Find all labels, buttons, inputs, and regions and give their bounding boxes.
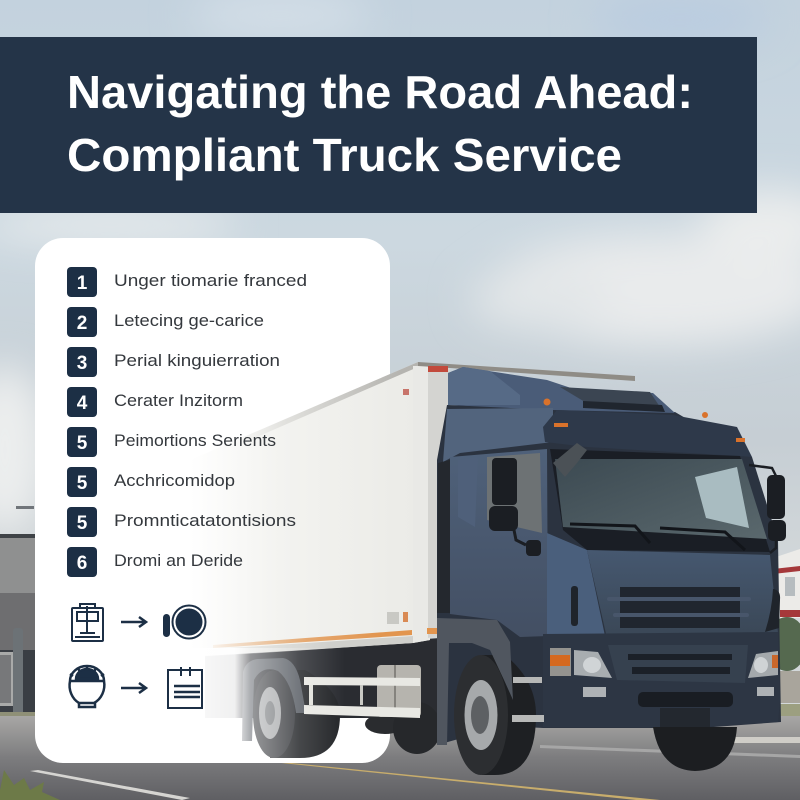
list item 2 bbox=[67, 307, 264, 337]
arrow: equipment to wheel bbox=[121, 617, 146, 627]
upper grille bbox=[571, 586, 780, 632]
list item 8 bbox=[67, 547, 243, 577]
list item 7: Promnticatatontisions bbox=[114, 511, 296, 530]
front right wheel bbox=[653, 727, 737, 771]
bumper bbox=[543, 632, 780, 727]
cargo box bbox=[190, 362, 635, 657]
background: right building, bush and fence bbox=[740, 549, 800, 737]
list item 1: 1 bbox=[77, 273, 88, 294]
windows bbox=[458, 453, 542, 533]
front hood bbox=[587, 550, 778, 638]
list item 3 bbox=[67, 347, 280, 377]
panel: white checklist card bbox=[35, 238, 390, 763]
list item 2: Letecing ge-carice bbox=[114, 311, 264, 330]
list item 1 bbox=[67, 267, 307, 297]
rear wheels bbox=[253, 670, 441, 758]
list item 6: 5 bbox=[77, 473, 88, 494]
list item 7 bbox=[67, 507, 296, 537]
front corner panel bbox=[547, 533, 605, 636]
list item 2: 2 bbox=[77, 313, 87, 334]
list item 4 bbox=[67, 387, 243, 417]
rear vent strip bbox=[437, 458, 457, 613]
list item 6 bbox=[67, 467, 235, 497]
fog lights and lower intake bbox=[583, 687, 774, 730]
title banner bbox=[0, 37, 757, 213]
list item 4: 4 bbox=[77, 393, 88, 414]
icon: notepad bbox=[168, 667, 202, 708]
mirrors bbox=[489, 443, 786, 556]
numbered list bbox=[67, 267, 307, 577]
list item 7: 5 bbox=[77, 513, 88, 534]
list item 4: Cerater Inzitorm bbox=[114, 391, 243, 410]
list item 5 bbox=[67, 427, 276, 457]
list item 8: 6 bbox=[77, 553, 87, 574]
background: left building and pole bbox=[0, 506, 36, 790]
cab dark base bbox=[437, 405, 781, 745]
cab steps bbox=[512, 677, 544, 722]
road bbox=[0, 712, 800, 800]
side guard rails and fuel tank bbox=[304, 665, 421, 718]
truck bbox=[190, 362, 786, 775]
icon: wheel bbox=[163, 606, 206, 638]
icon: gauge bbox=[70, 666, 104, 707]
front mudguard bbox=[437, 618, 513, 745]
list item 1: Unger tiomarie franced bbox=[114, 271, 307, 290]
list item 5: Peimortions Serients bbox=[114, 431, 276, 450]
list item 5: 5 bbox=[77, 433, 88, 454]
list item 8: Dromi an Deride bbox=[114, 551, 243, 570]
windshield bbox=[550, 449, 770, 552]
title line 2: Compliant Truck Service bbox=[67, 129, 622, 181]
front left wheel bbox=[454, 655, 536, 775]
list item 3: 3 bbox=[77, 353, 87, 374]
roof visor bbox=[543, 410, 752, 457]
icon: equipment unit bbox=[72, 604, 103, 641]
lower grille bbox=[608, 645, 748, 683]
list item 3: Perial kinguierration bbox=[114, 351, 280, 370]
roof deflector bbox=[448, 367, 675, 413]
headlamps bbox=[550, 648, 778, 678]
cab upper side bbox=[443, 408, 553, 462]
panel fade over the truck bbox=[170, 648, 345, 763]
title line 1: Navigating the Road Ahead: bbox=[67, 66, 693, 118]
chassis bbox=[205, 638, 440, 718]
arrow: gauge to document bbox=[121, 683, 146, 693]
marker lights bbox=[544, 398, 745, 442]
list item 6: Acchricomidop bbox=[114, 471, 235, 490]
cab door bbox=[450, 449, 548, 637]
rear mudguard bbox=[242, 658, 306, 741]
